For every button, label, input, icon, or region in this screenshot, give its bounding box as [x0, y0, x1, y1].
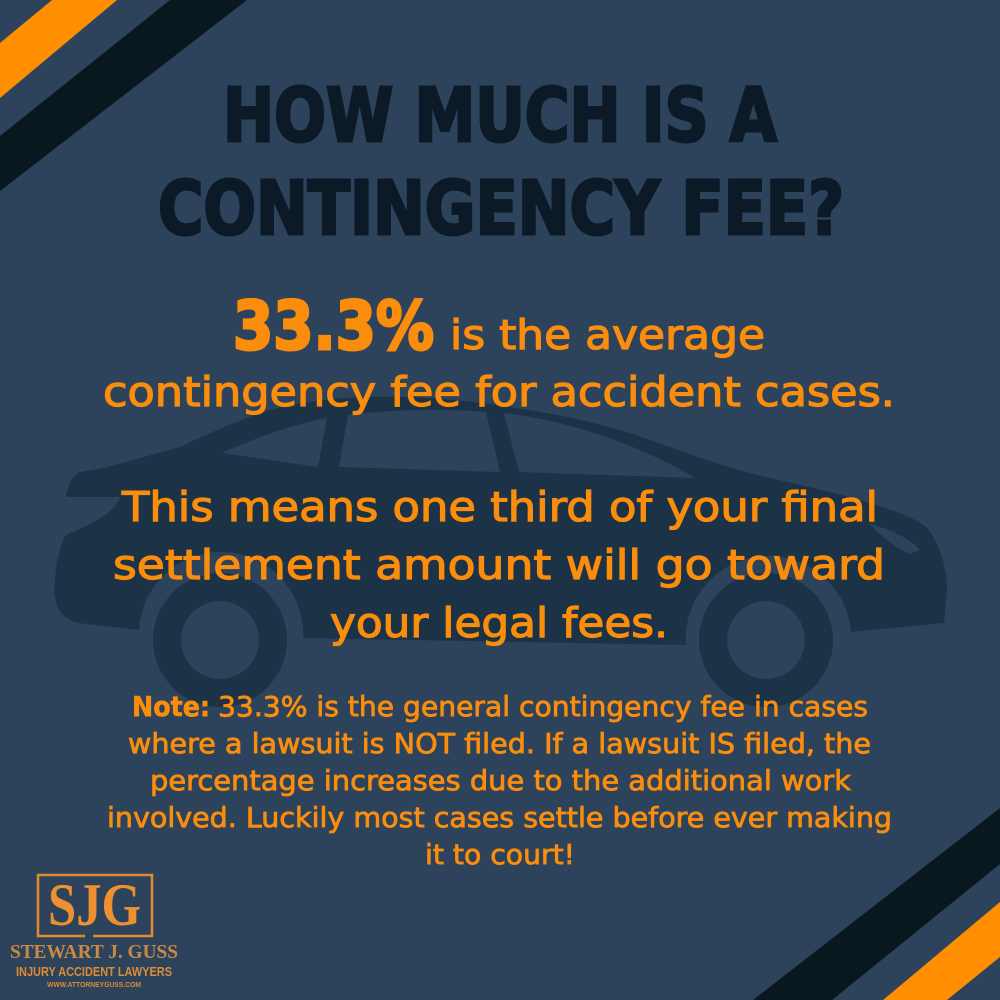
- title: CONTINGENCY FEE?: [158, 166, 844, 252]
- text block: explanation: settlement amount will go toward: [113, 541, 885, 589]
- text block: explanation: [113, 483, 885, 647]
- text block: note: involved. Luckily most cases settle before ever making: [107, 801, 892, 834]
- statistic: average contingency fee: [103, 287, 895, 416]
- text block: explanation: your legal fees.: [330, 599, 668, 647]
- logo: SJG Stewart J. Guss: SJG: [48, 872, 141, 938]
- title: HOW MUCH IS A: [223, 73, 777, 159]
- text block: note: percentage increases due to the additional work: [150, 764, 852, 797]
- logo: SJG Stewart J. Guss: WWW.ATTORNEYGUSS.COM: [47, 982, 141, 989]
- statistic: average contingency fee: is the average: [450, 311, 765, 359]
- logo: SJG Stewart J. Guss: STEWART J. GUSS: [10, 941, 178, 963]
- text block: explanation: This means one third of your final: [121, 483, 878, 531]
- text block: note: [107, 690, 892, 871]
- decorative stripes: top left: [0, 0, 247, 191]
- logo: SJG Stewart J. Guss: [10, 872, 178, 989]
- text block: note: Note:: [132, 690, 210, 723]
- icon: car silhouette: [54, 397, 947, 707]
- text block: note: it to court!: [425, 838, 575, 871]
- statistic: average contingency fee: 33.3%: [233, 287, 434, 365]
- title: [158, 73, 844, 252]
- text block: note: 33.3% is the general contingency fee in cases: [218, 690, 868, 723]
- decorative stripes: bottom right: [753, 808, 1000, 1000]
- text block: note: where a lawsuit is NOT filed. If a lawsuit IS filed, the: [128, 727, 871, 760]
- logo: SJG Stewart J. Guss: INJURY ACCIDENT LAWYERS: [16, 964, 172, 979]
- statistic: average contingency fee: contingency fee for accident cases.: [103, 368, 895, 416]
